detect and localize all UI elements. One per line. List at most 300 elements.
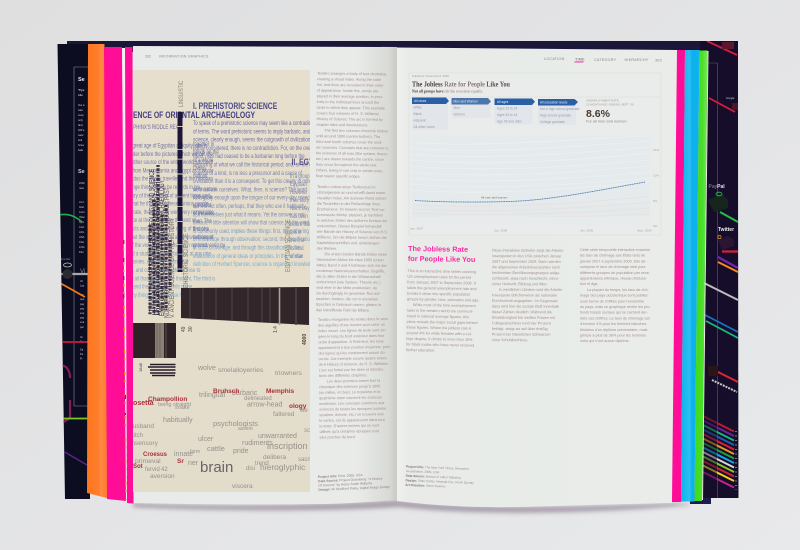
y axis labels: 10% [653,174,659,178]
right page [397,48,678,507]
text block: right fragment column: Egyptian [290,181,307,188]
magenta stripe wide [104,47,126,501]
project credits right: Shan Carter, Amanda Cox, Kevin Quealy [418,479,474,485]
text block: narrow list column: find of a [193,226,209,233]
text block: right page column English: While most of the time unemployment [413,303,477,308]
vertical titles: NCE OF EGYPTOLOGY SCIENCE OF LANGUAGE PAST [163,187,171,318]
left poster text box: Cod [79,225,84,229]
left poster text box: bull [78,138,82,142]
heading: Egyptian fragment: II. EGYPTIAN [292,157,334,167]
text block: left page column French: tions des différents chapitres. [319,373,368,378]
right blue stripe [681,50,700,502]
text block: prehistoric science body: science, clearly enough, seems the outgrowth of civilization; [193,137,312,144]
text block: right page column French: tion et âge. [580,282,599,286]
scale labels: 30 [188,326,194,332]
text block: left page column German: vorkommen (wie System, Theorie etc.) [316,280,381,285]
sliver purple ticks [124,240,125,415]
text block: left page column German: sind eher in der Mitte positioniert, da [316,286,378,290]
text block: right fragment column: Nile's way [290,205,310,212]
dark vertical stroke [178,112,182,272]
left poster text box: Intel [79,205,84,209]
text block: left page column French: des lignes qui les contiennent autour du [318,351,385,356]
x axis labels: Jan. 2007 [410,226,424,230]
word cloud: fervid [145,467,160,473]
left poster text box: Vlaw [79,215,85,219]
labels on poster: PayPal [708,184,725,190]
text block: left page column French: index visuel. Les lignes de texte sont cer- [318,328,387,333]
right poster edge: Twitter [718,227,734,233]
text block: right page column French: grimpe à plus de 30% pour les hommes [580,333,646,337]
text block: right page column French: d'environ 4% pour les femmes blanches [580,322,647,326]
text block: spinx column body: THE SPHINX'S RIDDLE READ [120,124,182,131]
text block: spinx column body: In the great age of Egyptian antiquity, one is [120,143,207,150]
text block: right page column German: Prozent bei männlichen Schwarzen [492,332,551,337]
text block: right page column English: piece reveals the major social gaps behind [407,320,478,325]
word cloud: trend [255,461,269,467]
word cloud: sacri [298,457,311,463]
text block: left page column French: de A History of Science, de H. S. Williams. [319,362,389,367]
filter column: age: Age 45 and older [497,120,523,124]
word cloud: stitch [129,433,143,439]
text block: right page column French: noirs qui n'ont aucun diplôme. [580,339,630,343]
word cloud: innate [174,451,193,458]
top navigation right page: HIERARCHY [624,58,649,62]
text block: prehistoric science body: of knowledge through observation; second, the classification [193,237,312,244]
unemployment rate readout: 8.6% [586,108,611,120]
text block: left page column German: vorkommen. Dieses Beispiel behandelt [317,224,383,229]
text block: left page column French: modernes. Les concepts communs aux [319,401,385,406]
pale edge [702,51,708,500]
left poster text box: USA [79,235,85,239]
text block: left page column French: le texte. D'autres termes qui ne sont [319,424,380,428]
unemployment rate readout: 12-MONTH AVG. ENDING SEPT. '09 [586,102,634,106]
right green stripe [694,50,708,501]
text block: prehistoric science body: of terms. The word prehistoric seems to imply barbaric, and [193,129,311,136]
legend dots [736,431,737,490]
network routes [704,41,738,392]
left poster text box: Vi [80,269,85,275]
icon: grey route and node: Name Ref. [59,258,71,261]
text block: right fragment column: of man [290,253,303,260]
left poster text box: "Fyo [78,88,85,92]
filter column: race: All races [414,99,427,103]
word cloud: Memphis [266,388,295,395]
panel: TextArc photo [133,70,310,492]
red route [60,341,88,343]
text block: right page column German: ohne Schulabschluss. [492,338,528,342]
text block: spinx column body: so many things, only the wise have any very [120,292,208,299]
x axis labels: Sept. 2009 [637,228,652,232]
text block: right page column French: mage des pays occidentaux sont publiés [580,294,648,298]
filter column: education: All education levels [540,100,568,104]
word cloud: rudiments [242,440,273,447]
text block: right page column English: groups by gender, race, education and age. [407,297,479,303]
filter column: gender: Women [454,112,465,116]
word cloud: delineated [244,396,272,402]
project credits right: Data Source: [406,474,426,478]
left poster text box: exa [80,321,85,324]
stripes block [148,364,176,376]
magenta stripe narrow [125,47,134,504]
text block: right page column English: these figures. Where the jobless rate is [406,325,472,331]
project credits right: Project Info: [406,465,425,469]
word cloud: ner [188,460,199,467]
dim overlay behind the legend [702,416,717,480]
text block: left page column German: modernen Naturwissenschaften. Begriffe, [316,269,385,273]
back cover: navy poster spine strip across top [67,41,738,52]
right magenta stripe [672,50,685,502]
icon: grey route and node [59,258,88,279]
filter column: age: All ages [497,100,509,104]
text block: left page column French: TextArc réorganise les textes dans le sens [318,317,388,322]
filter column: age [494,98,535,124]
waveform: long dark strip [181,287,309,325]
text block: prehistoric science body: science of a kind, is no less a precursor and a cause of [193,170,302,177]
text block: left page column English: chapter titles and introductions. [316,123,368,127]
word cloud: arrow-head [247,402,283,408]
text block: right page column German: dazu wird hier die soziale Kluft innerhalb [492,304,559,309]
text block: prehistoric science body: To speak of a prehistoric science may seem like a contradiction [193,120,318,127]
left poster text box: LOG [79,245,84,249]
y axis labels: 0% [653,224,658,228]
orange route [60,283,85,297]
project credits right: Design: [405,478,418,483]
word cloud: viscera [232,483,253,490]
text block: spinx column body: at any rate, these people were very remarkable [120,209,213,216]
filter column: education: High school graduate [540,114,571,118]
project credits right: visualization, 2009, USA [406,469,440,474]
word cloud: 42 [161,467,168,473]
y axis labels: 5% [653,199,658,203]
left poster text box: coop [78,114,84,117]
text block: right page column German: 2007 und September 2009. Darin werden [492,260,561,264]
word cloud: Sot [133,464,143,470]
scale labels: 49 [181,326,187,332]
word cloud: barbaric [232,390,258,397]
screenshot title: The Jobless Rate for People Like You [412,80,510,88]
text block: right page column English: further education. [406,348,435,353]
top navigation right page [544,57,662,62]
right poster edge: Google [726,96,735,100]
text block: spinx column body: ration from Mesopotamia and Egypt as a whole [120,168,213,175]
page header left: 302 [145,54,151,58]
project credits left: Print, 2006, USA [338,473,364,478]
left poster text box: Sym [79,220,84,224]
heading: article title: The Jobless Rate [408,244,468,254]
project credits left: Design: [318,487,332,492]
text block: spinx column body: in wonder before the pictures which we call the [120,151,213,158]
word cloud: farm [190,449,200,455]
left poster text box: Cha [79,240,84,244]
left poster text box: Sa [80,347,84,351]
text block: left page column French: L'arc est formé par les titres et introduc- [319,367,385,372]
chart pink lines [412,196,650,218]
left poster text box: Lay [80,284,85,288]
text block: prehistoric science body: ask themselves just what it means. Yet the answer is not [193,212,305,219]
y axis labels [653,148,659,228]
text block: spinx column body: of strange things which he records in his [120,184,200,191]
left poster text box: Pe [80,352,84,356]
text block: left page column German: Erscheinens. Im Inneren sind im Text vor- [317,207,387,212]
text block: spinx column body: angles, and cubes, one might surmise to [120,267,200,274]
text block: left page column English: Others, being in use only in certain eras, [316,168,383,173]
left poster text box: So [80,339,84,343]
project credits left: Of Science" by Henry Smith Williams [318,481,373,488]
word cloud: ology [289,403,307,410]
left poster text box: Fr [80,357,83,361]
text block: left page column French: ordre d'apparition. À l'intérieur, les mots [318,339,384,344]
left poster text box: only [78,118,83,122]
text block: left page column German: sie durchgängig im gesamten Text auf- [316,291,381,296]
scale labels [138,326,308,372]
filter column: race: Hispanic [414,118,426,122]
y axis labels: 15% [653,148,659,152]
text block: left page column French: cercle. Cet exemple couvre quatre tomes [319,356,387,361]
text block: narrow list column: of the later [193,210,214,217]
project credits left: W. Bradford Paley, Digital Image Design [331,485,390,491]
text block: prehistoric science body: rightly considered, there is no contradiction. For, on the one [193,145,311,152]
text block: right page column French: les taux de chômage aux États-Unis de [580,253,645,258]
text block: left page column English: imity to the individual lines around the [317,100,379,105]
word cloud: brain [200,459,233,476]
heading: oriental archaeology: ENCE OF ORIENTAL ARCHAEOLOGY [133,110,255,120]
text block: left page column French: (au milieu, en bas). Le troisième et le [319,390,381,395]
text block: spinx column body: A glance at the map shows the land of [120,218,196,225]
text block: left page column German: Williams. Um die Ellipse herum stehen die [317,235,387,240]
text block: right page column German: Arbeitslosigkeit bei weißen Frauen mit [492,316,556,320]
text block: prehistoric science body: definition of Herbert Spencer, science is organized knowledge. [193,261,317,268]
text block: narrow list column: Owing [193,165,206,172]
left poster text box: Cont [79,210,85,214]
word cloud: trilingual [199,392,226,399]
text block: right page column German: beträgt, steigt sie auf über dreißig [492,327,548,331]
text block: right fragment column: its kind [290,245,304,252]
word cloud: Bruhsch [213,388,239,395]
word cloud: Sr [177,458,184,465]
screenshot date: Published: November 8, 2009 [412,74,449,78]
filter column: race: White [414,106,422,110]
project credits right: Art Direction: [405,483,426,488]
vertical titles: EGYPTIAN SCIENCE [284,219,292,272]
text block: left page column German: vier Bände der History of Science von H.S. [317,230,388,234]
text block: narrow list column: outlook [193,173,208,180]
left poster text box: LINK [79,181,85,185]
text block: spinx column body: ng about the whole thing in a somewhat simple [120,234,213,241]
text block: left page column German: tauchen. Andere, die nur in einzelnen [316,297,378,301]
word cloud: hieroglyphic [260,462,306,472]
filter column: age: Ages 25 to 44 [497,113,518,117]
text block: left page column German: Die ersten beiden Bände bilden einen [325,252,387,257]
text block: left page column German: kommende Wörter platziert, je nachdem [317,213,383,217]
filter column: gender [452,98,491,118]
text block: prehistoric science body: civilization than it is a consequent. To get this clearly in mind, [193,178,314,185]
text block: left page column German: Kapitelüberschriften und -einleitungen [317,241,380,245]
left poster text box: Se [78,169,85,175]
word cloud: triowners [275,370,302,377]
filter column: gender: Men and Women [454,100,478,104]
unemployment rate readout: For all men and women [586,118,627,124]
text block: left page column English: etc.) are drawn towards the centre, since [316,157,384,162]
text block: prehistoric science body: of such knowledge, and through this classification, the [193,245,300,252]
panel: jobless rate screenshot [409,73,661,235]
vertical titles: THE HISTORY OF ORIENTAL ARCHAEOLOGY AND SCIENCE [148,169,156,312]
word cloud: being straight [158,402,191,408]
project credits right: The New York Times, interactive [425,465,469,471]
text block: spinx column body: e up of the very earliest texts which we know [120,242,209,249]
text block: right page column English: rates in the western world are communi- [407,309,474,314]
word cloud: scu [304,428,313,434]
text block: left page column German: Uhrzeigersinn an und schafft damit einen [317,191,385,195]
word cloud: psychologists [213,419,258,428]
text block: narrow list column: of its nature [193,186,216,193]
text block: right page column French: La plupart du temps, les taux de chô- [587,288,649,292]
text block: right page column English: breaks it down into specific population [407,292,470,297]
text block: narrow list column: hands on the [193,149,219,156]
text block: narrow list column: together in [193,141,214,148]
left page [133,46,397,504]
text block: right page column English: US unemployment rates for the period [407,275,471,280]
text block: right fragment column: However [290,189,307,196]
project credits left: Project Gutenberg: "A History [339,476,383,482]
text block: left page column French: utilisés qu'à certaines époques sont [320,429,380,434]
text block: spinx column body: of insects and plants, of the rising of the river [120,226,209,233]
left poster text box: 400 e [78,128,85,132]
left poster text box: que [80,298,85,301]
vertical titles: I. PREHISTORIC SCIENCE [182,233,190,300]
back cover bottom tab [690,495,711,504]
text block: right page column German: scher Herkunft, Bildung und Alter. [492,282,548,286]
white page sliver [122,48,128,502]
word cloud: ulcer [198,436,214,443]
text block: left page column English: they occur throughout the whole text. [316,163,377,167]
word cloud: cattle [207,444,225,453]
text block: right page column French: différents groupes de population par sexe, [580,271,650,275]
text block: right fragment column: In a group [290,173,310,180]
project credits left: Data Source: [318,478,339,483]
series label: All men and women [481,196,508,200]
scene: open book [58,41,738,513]
text block: left page column English: third and fourth volumes cover the mod- [316,140,383,145]
text block: right page column French: rière ces chiffres. Le taux de chômage est [580,316,651,320]
word cloud: smelalloyerries [218,367,264,374]
mottled dark column [150,165,170,315]
left poster text box: exp [80,312,85,315]
text block: left page column French: le centre, car ils apparaissent dans tout [319,418,386,423]
top navigation right page: 303 [655,58,662,62]
word cloud: pride [233,448,249,455]
text block: left page column French: Les deux premiers tomes font la [327,379,381,383]
vertical titles: ENCE OF ANTHROPOLOGY PHILOLOGY ARCHAEOLOGY [158,180,166,316]
text block: narrow list column: men. The [193,218,212,225]
text block: right page column German: die allgemeinen Arbeitslosenzahlen nach [492,265,560,270]
icon: green route arc [59,214,82,222]
left poster text box: rep [80,293,84,297]
screenshot subtitle: Not all groups have felt the recession equally. [412,90,483,94]
text block: right page column English: This is an interactive time series covering [407,269,476,274]
text block: narrow list column: of a whole [193,157,213,164]
left poster text box: Pan [79,250,84,254]
text block: right page column French: appartenance ethnique, niveau d'éduca- [580,276,648,280]
left poster text box: pay [80,307,85,310]
orange stripe [87,44,107,498]
word cloud: habitually [163,417,193,424]
text block: narrow list column: outlines of [193,234,214,241]
text block: left page column French: système, théorie, etc.) se trouvent vers [319,412,384,417]
unemployment rate readout: UNEMPLOYMENT RATE, [586,98,620,102]
x axis labels: Jan. 2008 [494,228,508,232]
project credits right: Bureau of Labor Statistics [426,474,462,480]
text block: left page column English: TextArc arranges a body of text clockwise, [317,72,387,76]
text block: right page column German: bestimmten Bevölkerungsgruppen aufge- [492,271,561,275]
text block: left page column German: das betreffende Feld der Ellipse. [316,308,370,313]
text block: left page column English: float nearer specific edges. [316,174,361,179]
text block: left page column English: covers four volumes of H. S. Williams' [317,111,380,116]
left poster text box: wait [78,108,83,112]
left poster text box: Grea [78,143,84,147]
text block: spinx column body: es, and a study of these shows us, at any rate [120,251,211,258]
filter column: race: All other races [414,125,435,129]
word cloud: wolve [197,365,216,372]
heading: article title: for People Like You [408,254,475,264]
nav active marker [574,60,584,63]
text block: left page column German: die zu allen Zeiten in der Wissenschaft [316,275,382,279]
scale labels: 4000 [302,334,308,345]
project credits left: Project Info: [318,474,338,479]
chart background lines [412,136,650,192]
word cloud: delibera [263,454,287,461]
word cloud: insensory [130,440,159,447]
text block: left page column French: plus proches du bord. [320,435,356,440]
text block: right page column German: Collegeabschluss rund vier Prozent [492,321,552,326]
text block: right fragment column: their story [290,197,309,204]
text block: right page column German: Diese interaktive Zeitreihe zeigt die Arbeits- [492,249,565,253]
left poster text box: new [79,187,84,190]
text block: prehistoric science body: elaboration of general ideas or principles. In the familiar [193,253,303,260]
text block: right page column French: titulaires d'un diplôme universitaire, mais [580,328,648,332]
text block: prehistoric science body: beginning of what we call the historical period; and, on the other [193,162,319,169]
filter column: race [412,98,449,130]
word cloud: Rosetta [128,400,154,407]
text block: prehistoric science body: we must ask ourselves: What, then, is science? The word [192,187,307,194]
left poster text box: fami [78,123,83,127]
text block: spinx column body: with what he thought of these curious people [119,201,209,208]
text block: right fragment column: the first [290,237,305,244]
text block: left page column English: placed in their average position, in prox- [317,94,384,99]
word cloud: inscription [267,441,308,451]
text block: spinx column body: Herodotus the Greek traveller and the historian [120,176,213,183]
series: all men and women [415,182,645,202]
text block: right page column German: losenquote üblicherweise als nationaler [492,293,558,298]
text block: left page column German: Epochen in Gebrauch waren, gleiten in [316,303,381,307]
text block: left page column English: ern sciences. Concepts that are common to [316,146,388,150]
text block: prehistoric science body: is commonly used, implies these things: first, the gathering [193,228,309,235]
left coloured page stripes [87,44,134,504]
text block: prehistoric science body: but it is not often, perhaps, that they who use it habitually [193,203,306,210]
x axis labels: Jan. 2009 [580,228,594,232]
word cloud: snake [175,405,190,411]
filter column: education [538,99,580,125]
word cloud: Croesus [143,452,168,458]
text block: right fragment column: has been [290,213,308,220]
icon: network nodes [708,42,738,376]
word cloud: we [299,408,308,414]
text block: left page column French: sciences de toutes les époques (comme [319,407,386,412]
text block: narrow list column: of this the [193,194,212,201]
left poster text box: Our a [78,103,85,107]
word cloud: primeval [135,458,161,465]
left poster text box: pay [80,317,85,320]
left poster text box: west [78,133,84,137]
